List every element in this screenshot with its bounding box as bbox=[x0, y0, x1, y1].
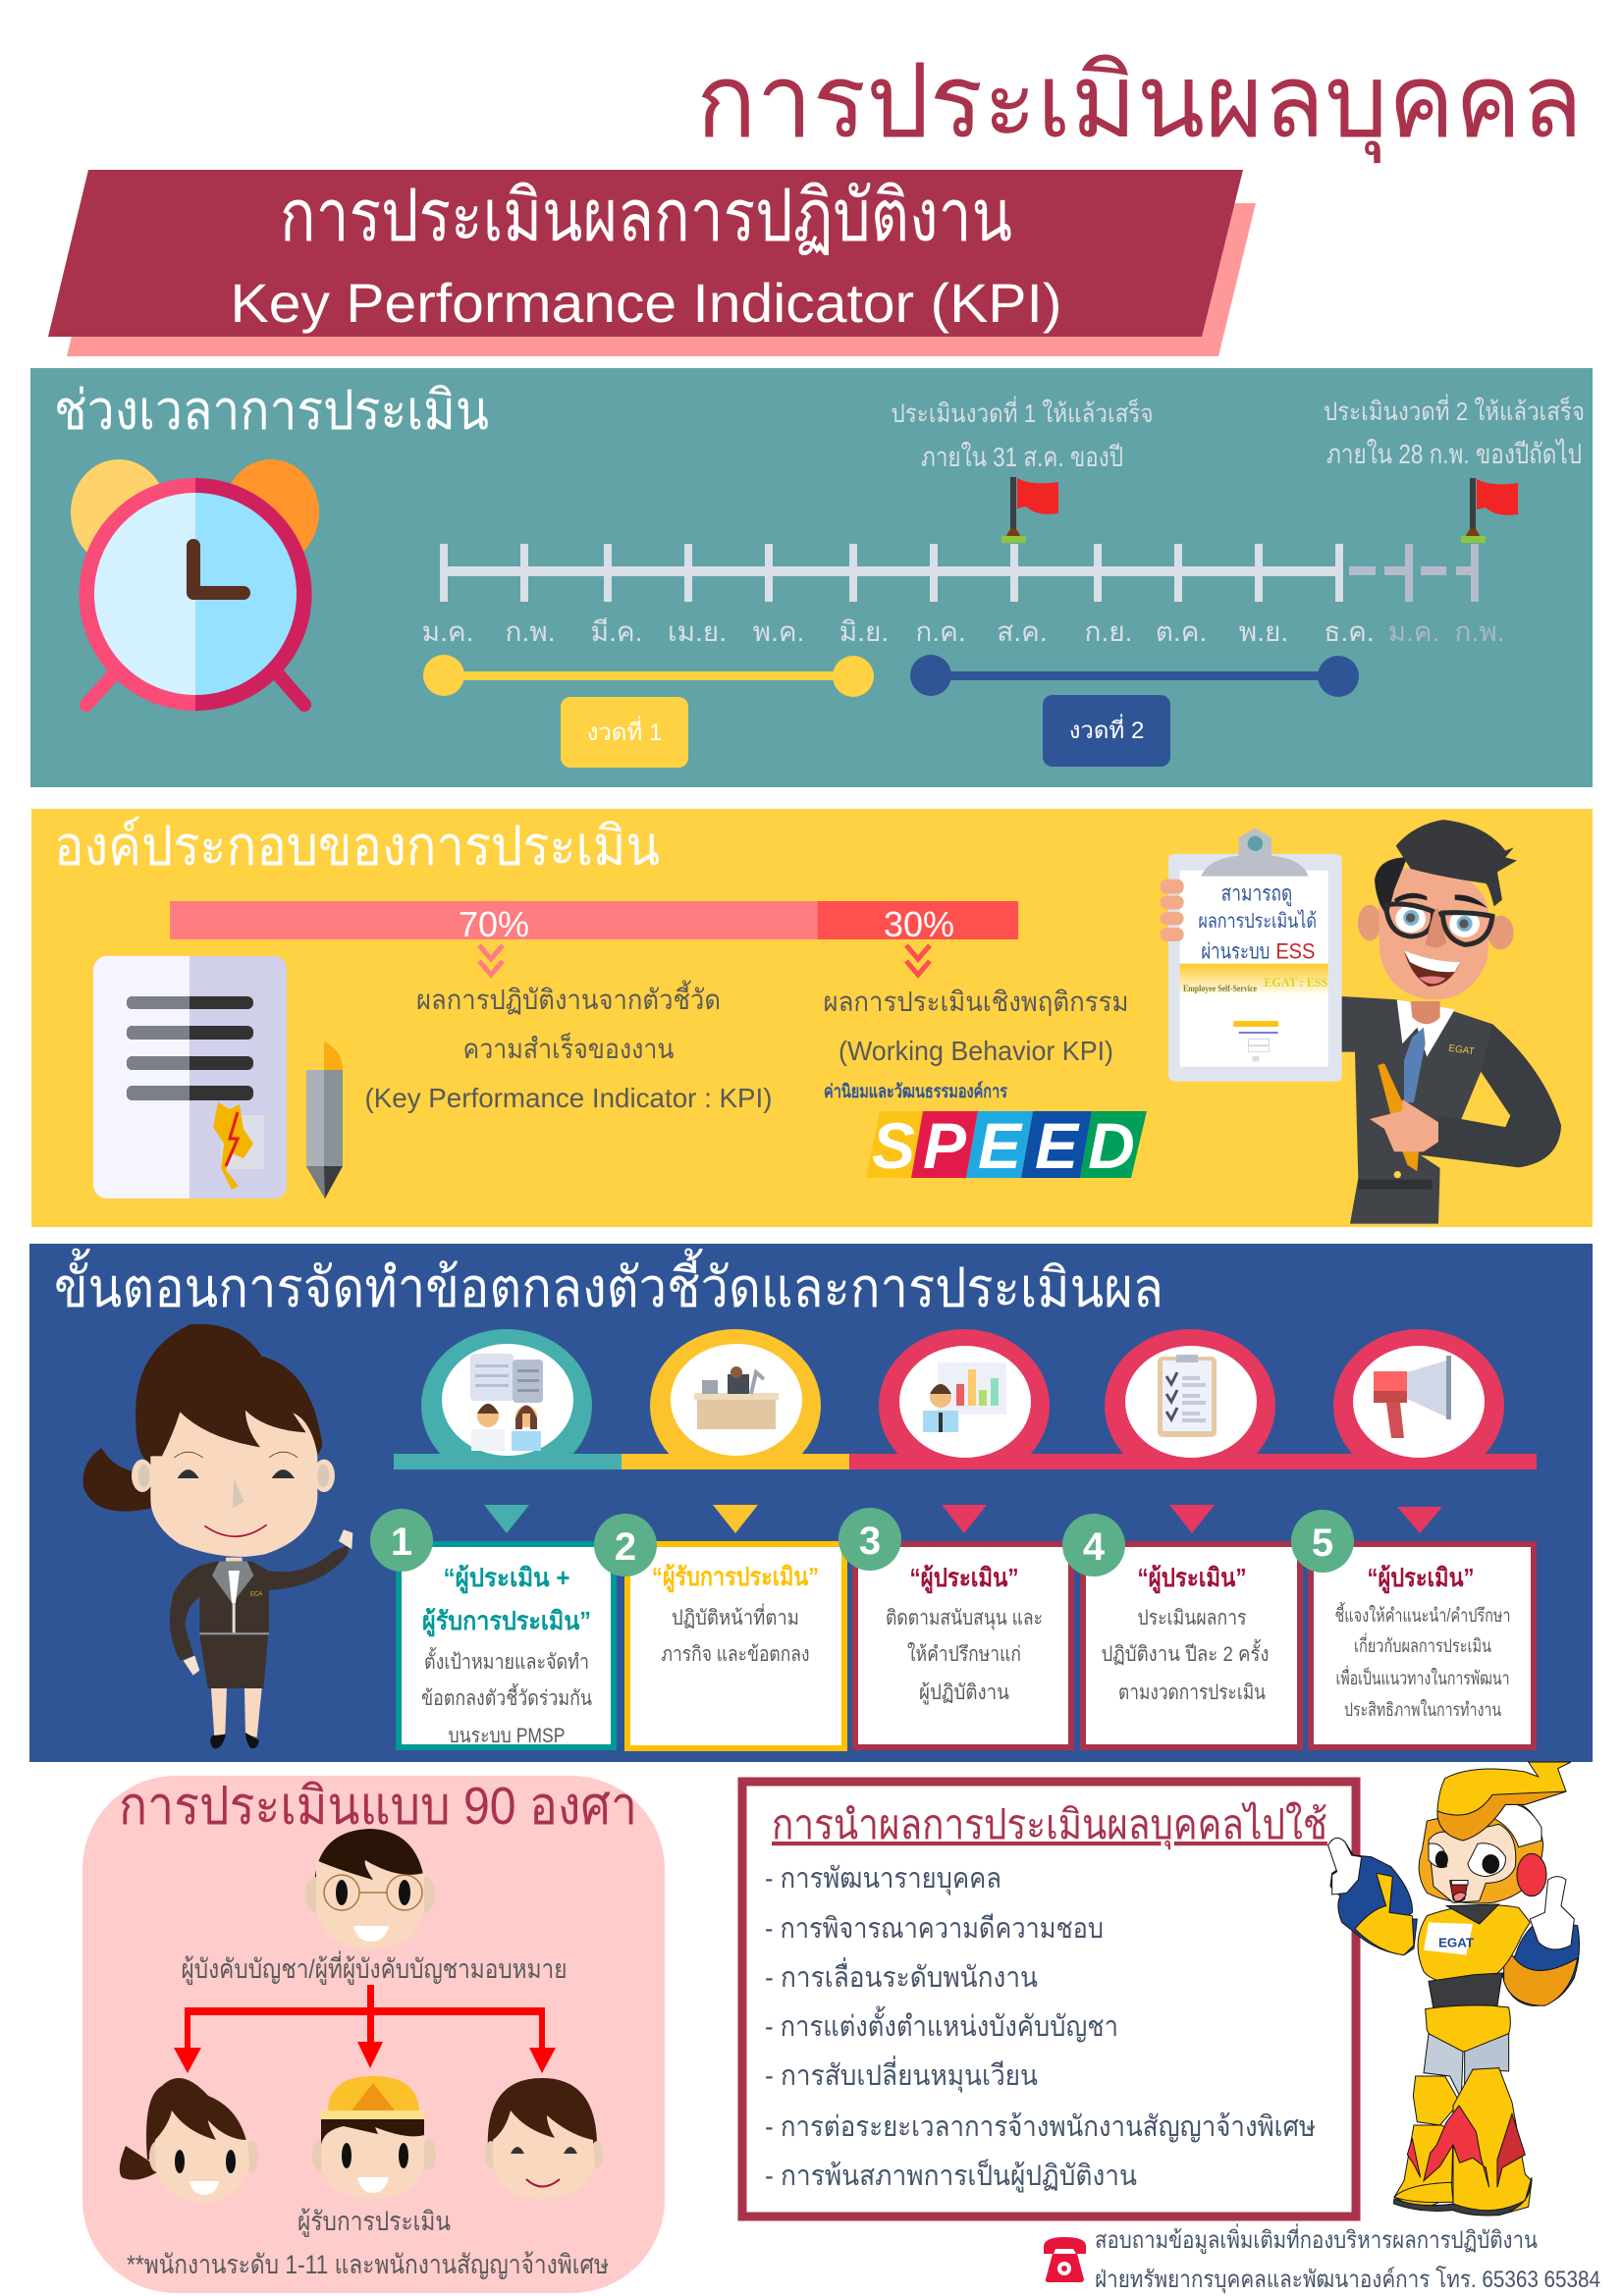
step box 5: ชี้แจงให้คำแนะนำ/คำปรึกษา bbox=[1335, 1602, 1510, 1627]
step box 3: ติดตามสนับสนุน และ bbox=[886, 1607, 1043, 1630]
label: supervisor: ผู้บังคับบัญชา/ผู้ที่ผู้บังคับบัญชามอบหมาย bbox=[181, 1950, 568, 1985]
step box 3: “ผู้ประเมิน” bbox=[909, 1563, 1019, 1594]
clipboard: ผ่านระบบ bbox=[1201, 939, 1270, 964]
list of uses: - การแต่งตั้งตำแหน่งบังคับบัญชา bbox=[765, 2005, 1118, 2043]
logo: SPEED: P bbox=[923, 1109, 967, 1182]
step box 2 bbox=[627, 1544, 844, 1748]
clipboard: สามารถดู bbox=[1221, 881, 1292, 906]
text: round 2 deadline: ประเมินงวดที่ 2 ให้แล้วเสร็จ bbox=[1324, 394, 1585, 426]
stacked bar: 70/30: 30% bbox=[884, 904, 954, 944]
list of uses: - การเลื่อนระดับพนักงาน bbox=[765, 1957, 1038, 1994]
month labels: ก.ย. bbox=[1085, 616, 1132, 647]
step box 3: ผู้ปฏิบัติงาน bbox=[919, 1682, 1009, 1705]
step box 5 bbox=[1311, 1544, 1534, 1747]
icon: flag round 2 bbox=[1461, 478, 1518, 543]
month labels bbox=[422, 616, 1504, 647]
step box 4 bbox=[1083, 1544, 1300, 1747]
step box 5: “ผู้ประเมิน” bbox=[1367, 1563, 1475, 1594]
step numbers: 4 bbox=[1083, 1525, 1106, 1569]
panel: process steps bbox=[29, 1244, 1593, 1762]
figure: EGAT mascot bbox=[1328, 1762, 1580, 2216]
icon: document bbox=[93, 956, 287, 1199]
list of uses bbox=[765, 1863, 1316, 2193]
icon: alarm clock bbox=[71, 459, 319, 711]
note: **พนักงานระดับ 1-11 และพนักงานสัญญาจ้างพิเศษ bbox=[127, 2250, 609, 2279]
text: round 2 deadline bbox=[1324, 394, 1585, 469]
step numbers: 3 bbox=[859, 1520, 881, 1563]
logo: SPEED: D bbox=[1088, 1109, 1135, 1182]
figure: EGAT mascot: EGAT bbox=[1438, 1935, 1474, 1949]
step box 1: บนระบบ PMSP bbox=[448, 1725, 566, 1747]
text: 70% description bbox=[365, 980, 772, 1113]
panel: 90 degree assessment bbox=[82, 1776, 665, 2293]
month labels: เม.ย. bbox=[668, 616, 727, 647]
text: round 1 deadline: ภายใน 31 ส.ค. ของปี bbox=[921, 441, 1123, 472]
icon: telephone bbox=[1044, 2237, 1086, 2282]
step box 1: ผู้รับการประเมิน” bbox=[422, 1606, 591, 1637]
stacked bar: 70/30: 70% bbox=[459, 904, 529, 944]
banner: KPI: การประเมินผลการปฏิบัติงาน bbox=[280, 175, 1012, 256]
figure: woman bbox=[83, 1324, 352, 1749]
step box 4: ประเมินผลการ bbox=[1137, 1607, 1247, 1629]
figure: woman: ECA bbox=[250, 1591, 262, 1597]
man's suit bbox=[1341, 996, 1561, 1224]
icon ring 2: desk bbox=[650, 1329, 821, 1456]
step box 5: เกี่ยวกับผลการประเมิน bbox=[1354, 1632, 1491, 1657]
month labels: ต.ค. bbox=[1156, 616, 1207, 647]
icon: flag round 1 bbox=[1001, 477, 1058, 543]
step box 1: ข้อตกลงตัวชี้วัดร่วมกัน bbox=[421, 1683, 592, 1710]
heading: 90 degree: การประเมินแบบ 90 องศา bbox=[119, 1777, 637, 1836]
range: round 2 bbox=[910, 655, 1359, 767]
text: 30% description bbox=[823, 987, 1129, 1102]
month labels: ม.ค. bbox=[1388, 616, 1439, 647]
logo: SPEED: E bbox=[978, 1109, 1023, 1182]
clipboard: EGAT : ESS bbox=[1264, 976, 1327, 989]
banner: KPI: Key Performance Indicator (KPI) bbox=[230, 272, 1062, 334]
arrows: chevrons bbox=[479, 945, 930, 975]
clipboard: Employee Self-Service bbox=[1183, 985, 1257, 994]
month labels: ก.พ. bbox=[1455, 616, 1504, 647]
month labels: มิ.ย. bbox=[839, 616, 889, 647]
heading: assessment period: ช่วงเวลาการประเมิน bbox=[54, 379, 489, 441]
title: การประเมินผลบุคคล bbox=[696, 45, 1583, 164]
clipboard bbox=[1161, 828, 1342, 1082]
text: 70% description: ผลการปฏิบัติงานจากตัวชี้วัด bbox=[416, 980, 721, 1015]
range: round 2: งวดที่ 2 bbox=[1069, 714, 1144, 744]
contact text: สอบถามข้อมูลเพิ่มเติมที่กองบริหารผลการปฏิบัติงาน bbox=[1095, 2223, 1538, 2255]
month labels: ก.พ. bbox=[506, 616, 555, 647]
stacked bar: 70/30 bbox=[170, 901, 1018, 944]
step numbers: 2 bbox=[615, 1525, 636, 1569]
text: 70% description: (Key Performance Indicator : KPI) bbox=[365, 1083, 772, 1113]
step box 2: ภารกิจ และข้อตกลง bbox=[662, 1643, 809, 1666]
text: round 1 deadline bbox=[892, 396, 1153, 472]
triangles bbox=[484, 1505, 1442, 1533]
banner: KPI bbox=[48, 170, 1256, 356]
text: 30% description: (Working Behavior KPI) bbox=[839, 1036, 1113, 1066]
step box 3 bbox=[855, 1544, 1071, 1747]
list of uses: - การสับเปลี่ยนหมุนเวียน bbox=[765, 2056, 1038, 2093]
step box 1: “ผู้ประเมิน + bbox=[444, 1563, 569, 1594]
step box 2: ปฏิบัติหน้าที่ตาม bbox=[672, 1603, 799, 1629]
arrows: cascade bbox=[174, 1985, 556, 2073]
month labels: พ.ย. bbox=[1239, 616, 1288, 647]
man's suit: EGAT bbox=[1448, 1043, 1475, 1057]
label: assessee: ผู้รับการประเมิน bbox=[298, 2207, 451, 2237]
figure: man with clipboard bbox=[1161, 820, 1561, 1224]
logo: SPEED: E bbox=[1035, 1109, 1080, 1182]
list of uses: - การพ้นสภาพการเป็นผู้ปฏิบัติงาน bbox=[765, 2158, 1137, 2193]
icon ring 4: checklist bbox=[1105, 1329, 1275, 1458]
man's head bbox=[1358, 820, 1517, 999]
clipboard: ผลการประเมินได้ bbox=[1198, 909, 1317, 933]
step numbers: 5 bbox=[1312, 1522, 1333, 1565]
step box 3: ให้คำปรึกษาแก่ bbox=[907, 1642, 1021, 1666]
step box 1: ตั้งเป้าหมายและจัดทำ bbox=[424, 1647, 589, 1674]
heading: use of results: การนำผลการประเมินผลบุคคลไปใช้ bbox=[772, 1801, 1327, 1850]
month labels: ส.ค. bbox=[997, 616, 1048, 647]
list of uses: - การพัฒนารายบุคคล bbox=[765, 1863, 1001, 1896]
logo: SPEED: S bbox=[872, 1109, 915, 1182]
panel: use of results bbox=[742, 1782, 1356, 2216]
month labels: ธ.ค. bbox=[1324, 616, 1375, 647]
month labels: ก.ค. bbox=[915, 616, 966, 647]
icon ring 3: chart bbox=[879, 1329, 1050, 1458]
heading: steps: ขั้นตอนการจัดทำข้อตกลงตัวชี้วัดและการประเมินผล bbox=[54, 1249, 1163, 1318]
heading: components: องค์ประกอบของการประเมิน bbox=[54, 815, 660, 877]
panel: assessment components bbox=[31, 809, 1593, 1227]
range: round 1: งวดที่ 1 bbox=[587, 716, 662, 746]
step box 5: เพื่อเป็นแนวทางในการพัฒนา bbox=[1335, 1665, 1510, 1689]
list of uses: - การต่อระยะเวลาการจ้างพนักงานสัญญาจ้างพิเศษ bbox=[765, 2111, 1316, 2143]
text: 70% description: ความสำเร็จของงาน bbox=[463, 1032, 674, 1064]
step box 4: ปฏิบัติงาน ปีละ 2 ครั้ง bbox=[1102, 1639, 1269, 1666]
face: supervisor bbox=[305, 1829, 435, 1949]
icon ring 1: discussion bbox=[421, 1329, 592, 1456]
step numbers bbox=[370, 1508, 1354, 1576]
step numbers: 1 bbox=[391, 1521, 412, 1564]
step box 1 bbox=[399, 1544, 614, 1747]
step bar bbox=[394, 1454, 1537, 1469]
text: 30% description: ผลการประเมินเชิงพฤติกรรม bbox=[823, 987, 1129, 1017]
logo: SPEED bbox=[866, 1109, 1147, 1182]
contact text bbox=[1095, 2223, 1600, 2294]
step box 4: “ผู้ประเมิน” bbox=[1137, 1563, 1247, 1594]
face: worker with helmet bbox=[312, 2076, 436, 2199]
face: female employee bbox=[120, 2078, 258, 2202]
text: round 1 deadline: ประเมินงวดที่ 1 ให้แล้วเสร็จ bbox=[892, 396, 1153, 428]
man's hand and pen bbox=[1370, 1063, 1438, 1171]
step box 5: ประสิทธิภาพในการทำงาน bbox=[1344, 1699, 1501, 1721]
face: male employee bbox=[485, 2078, 603, 2199]
list of uses: - การพิจารณาความดีความชอบ bbox=[765, 1913, 1104, 1945]
clipboard: ESS bbox=[1275, 939, 1315, 964]
timeline ruler bbox=[440, 544, 1479, 602]
step box 4: ตามงวดการประเมิน bbox=[1118, 1682, 1266, 1704]
icon: pencil bbox=[306, 1041, 343, 1199]
icon ring 5: megaphone bbox=[1333, 1329, 1504, 1458]
range: round 1 bbox=[423, 655, 874, 768]
month labels: มี.ค. bbox=[591, 616, 642, 647]
step box 2: “ผู้รับการประเมิน” bbox=[652, 1562, 819, 1593]
panel: assessment period bbox=[30, 368, 1593, 787]
text: 30% description: ค่านิยมและวัฒนธรรมองค์การ bbox=[824, 1081, 1008, 1102]
month labels: ม.ค. bbox=[422, 616, 473, 647]
contact bbox=[1044, 2223, 1600, 2294]
month labels: พ.ค. bbox=[753, 616, 804, 647]
